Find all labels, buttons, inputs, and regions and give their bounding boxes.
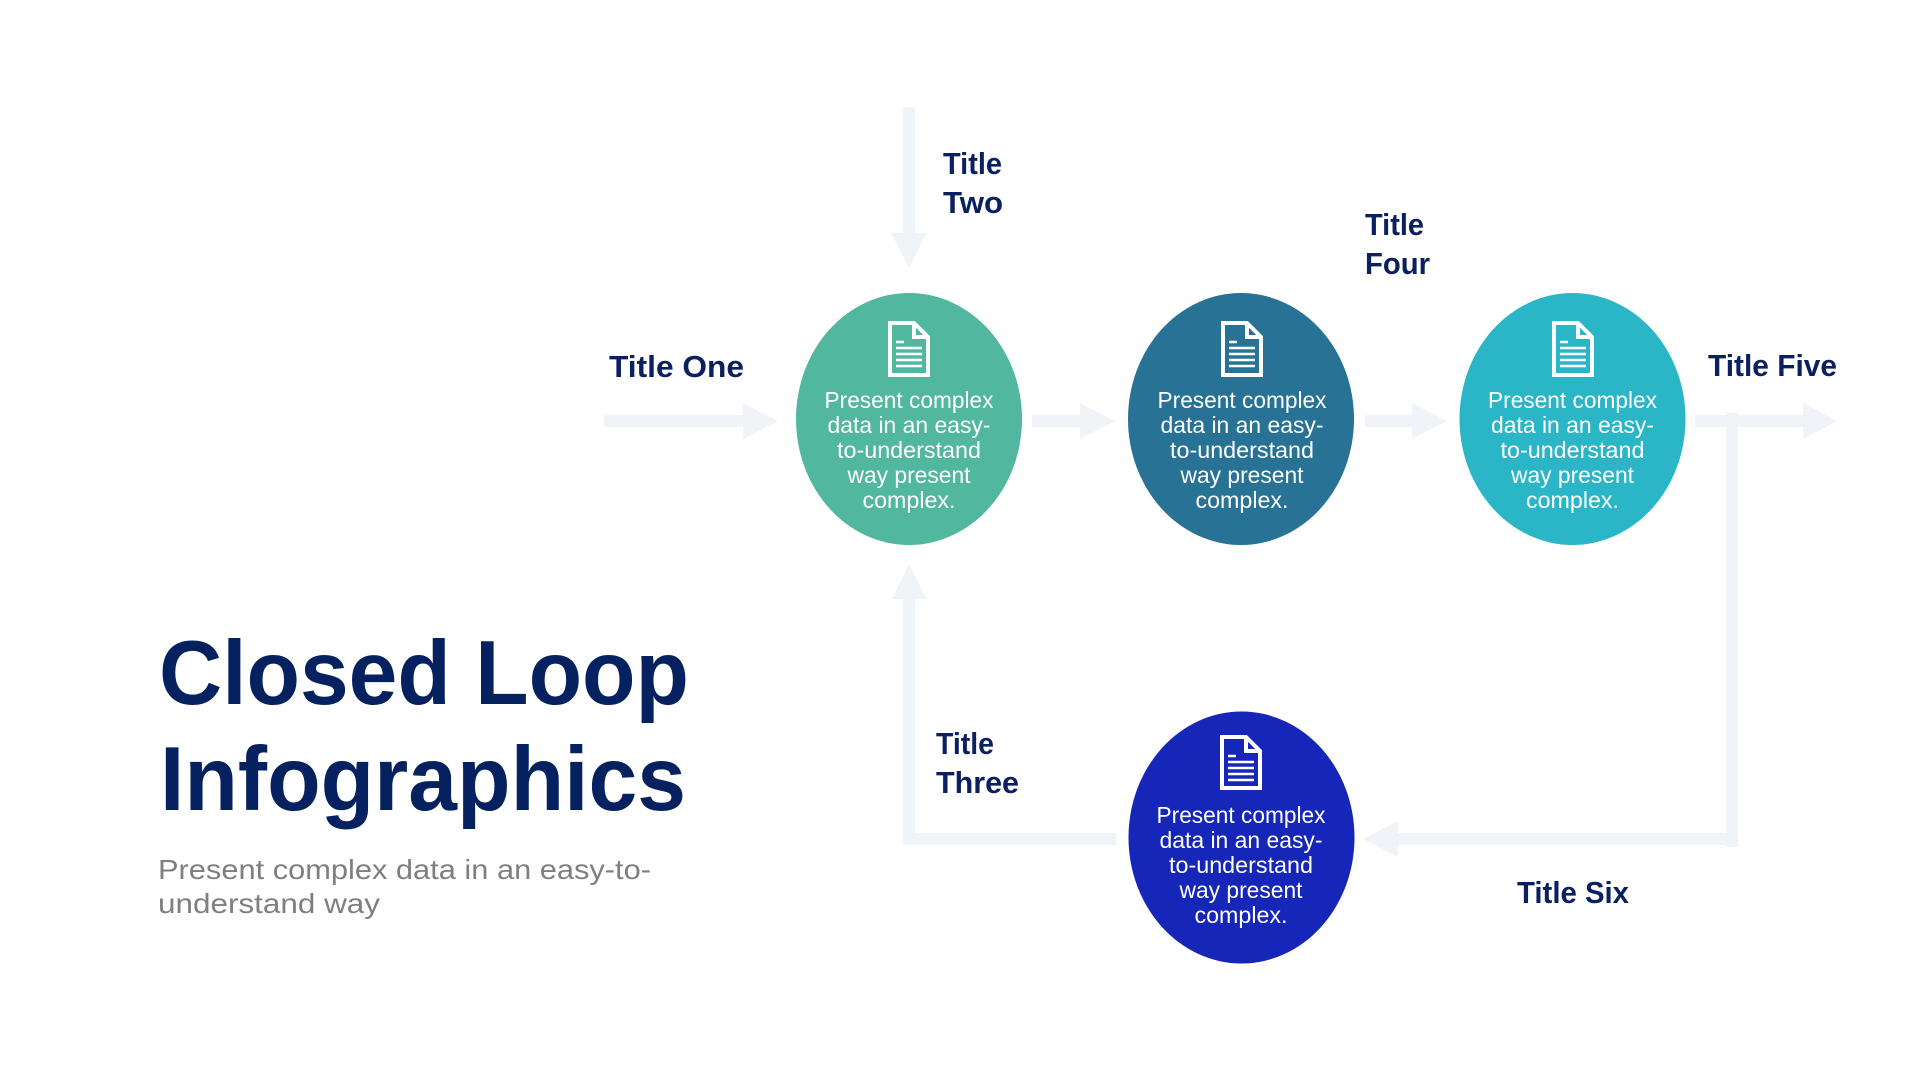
icon: document <box>1222 737 1260 788</box>
circle four text: Present complex <box>1156 802 1326 828</box>
arrow: feedback from circle four up into circle one <box>892 564 1116 845</box>
circle two text: complex. <box>1196 487 1288 513</box>
heading: title two: Title <box>943 146 1002 181</box>
arrow: out of circle three <box>1695 403 1837 439</box>
heading: title two <box>943 146 1003 220</box>
circle one text: complex. <box>862 487 956 513</box>
arrow: into circle one <box>604 403 778 439</box>
heading: title four: Title <box>1365 207 1424 242</box>
arrow: down into circle one <box>891 107 927 268</box>
circle four text: to-understand <box>1169 852 1313 878</box>
subtitle text: Present complex data in an easy-to- <box>158 854 651 885</box>
title <box>159 623 689 830</box>
arrow: feedback down and left into circle four <box>1363 413 1738 857</box>
circle one text: Present complex <box>824 387 994 413</box>
heading: title two: Two <box>943 185 1003 220</box>
circle three text: complex. <box>1526 487 1619 513</box>
heading: title four: Four <box>1365 246 1430 281</box>
circle three text: to-understand <box>1500 437 1644 463</box>
arrow: circle one to circle two <box>1032 403 1115 439</box>
heading: title three: Title <box>936 726 994 761</box>
heading: title one: Title One <box>609 349 744 384</box>
panel: circle two <box>1128 293 1354 545</box>
heading: title six: Title Six <box>1517 875 1630 910</box>
circle two text: way present <box>1180 462 1304 488</box>
circle three text: Present complex <box>1488 387 1657 413</box>
panel: circle one <box>796 293 1022 545</box>
panel: circle three <box>1460 293 1686 545</box>
icon: document <box>890 323 928 375</box>
circle three text <box>1488 387 1657 513</box>
circle one text <box>824 387 994 513</box>
heading: title three <box>936 726 1019 800</box>
heading: title four <box>1365 207 1430 281</box>
circle four text: complex. <box>1194 902 1288 928</box>
circle one text: to-understand <box>837 437 981 463</box>
circle three text: way present <box>1510 462 1635 488</box>
heading: title five: Title Five <box>1708 348 1837 383</box>
icon: document <box>1223 323 1261 375</box>
circle one text: way present <box>847 462 971 488</box>
icon: document <box>1554 323 1592 375</box>
subtitle text <box>158 854 651 919</box>
heading: title three: Three <box>936 765 1019 800</box>
circle three text: data in an easy- <box>1491 412 1654 438</box>
title: Closed Loop <box>159 623 689 724</box>
circle two text <box>1158 387 1327 513</box>
arrow: circle two to circle three <box>1365 403 1447 439</box>
circle one text: data in an easy- <box>828 412 990 438</box>
circle two text: Present complex <box>1158 387 1327 413</box>
circle four text: data in an easy- <box>1160 827 1322 853</box>
circle four text: way present <box>1179 877 1303 903</box>
panel: circle four <box>1128 712 1354 964</box>
circle two text: to-understand <box>1170 437 1314 463</box>
circle four text <box>1156 802 1326 928</box>
subtitle text: understand way <box>158 888 380 919</box>
title: Infographics <box>160 729 686 830</box>
circle two text: data in an easy- <box>1160 412 1324 438</box>
